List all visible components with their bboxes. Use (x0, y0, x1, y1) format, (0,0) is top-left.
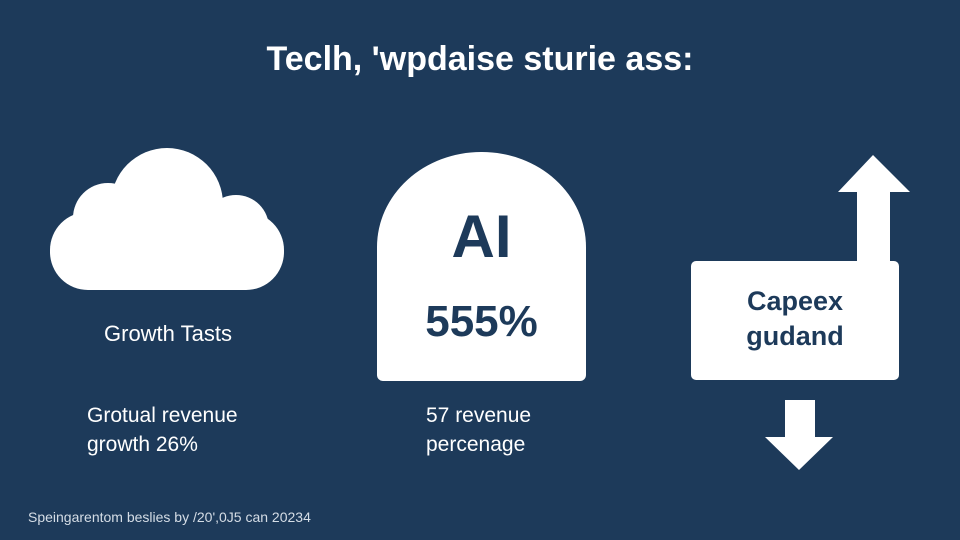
stat: 555%: 555% (425, 297, 538, 346)
heading: AI: AI (452, 203, 512, 270)
label: Growth Tasts: Growth Tasts (104, 321, 232, 346)
text block: middle (426, 404, 531, 456)
arrow: down (765, 400, 833, 470)
text block: left: growth 26% (87, 433, 198, 456)
panel: capex box (691, 261, 899, 380)
text block: left: Grotual revenue (87, 404, 238, 427)
footer: Speingarentom beslies by /20',0J5 can 20234 (28, 509, 311, 525)
panel: capex box: Capeex (747, 286, 843, 316)
panel: capex box: gudand (746, 321, 844, 351)
text block: middle: 57 revenue (426, 404, 531, 427)
text block: left (87, 404, 238, 456)
title: Teclh, 'wpdaise sturie ass: (267, 40, 693, 78)
panel: AI tombstone (377, 152, 586, 381)
arrow: up (838, 155, 910, 261)
text block: middle: percenage (426, 433, 525, 456)
